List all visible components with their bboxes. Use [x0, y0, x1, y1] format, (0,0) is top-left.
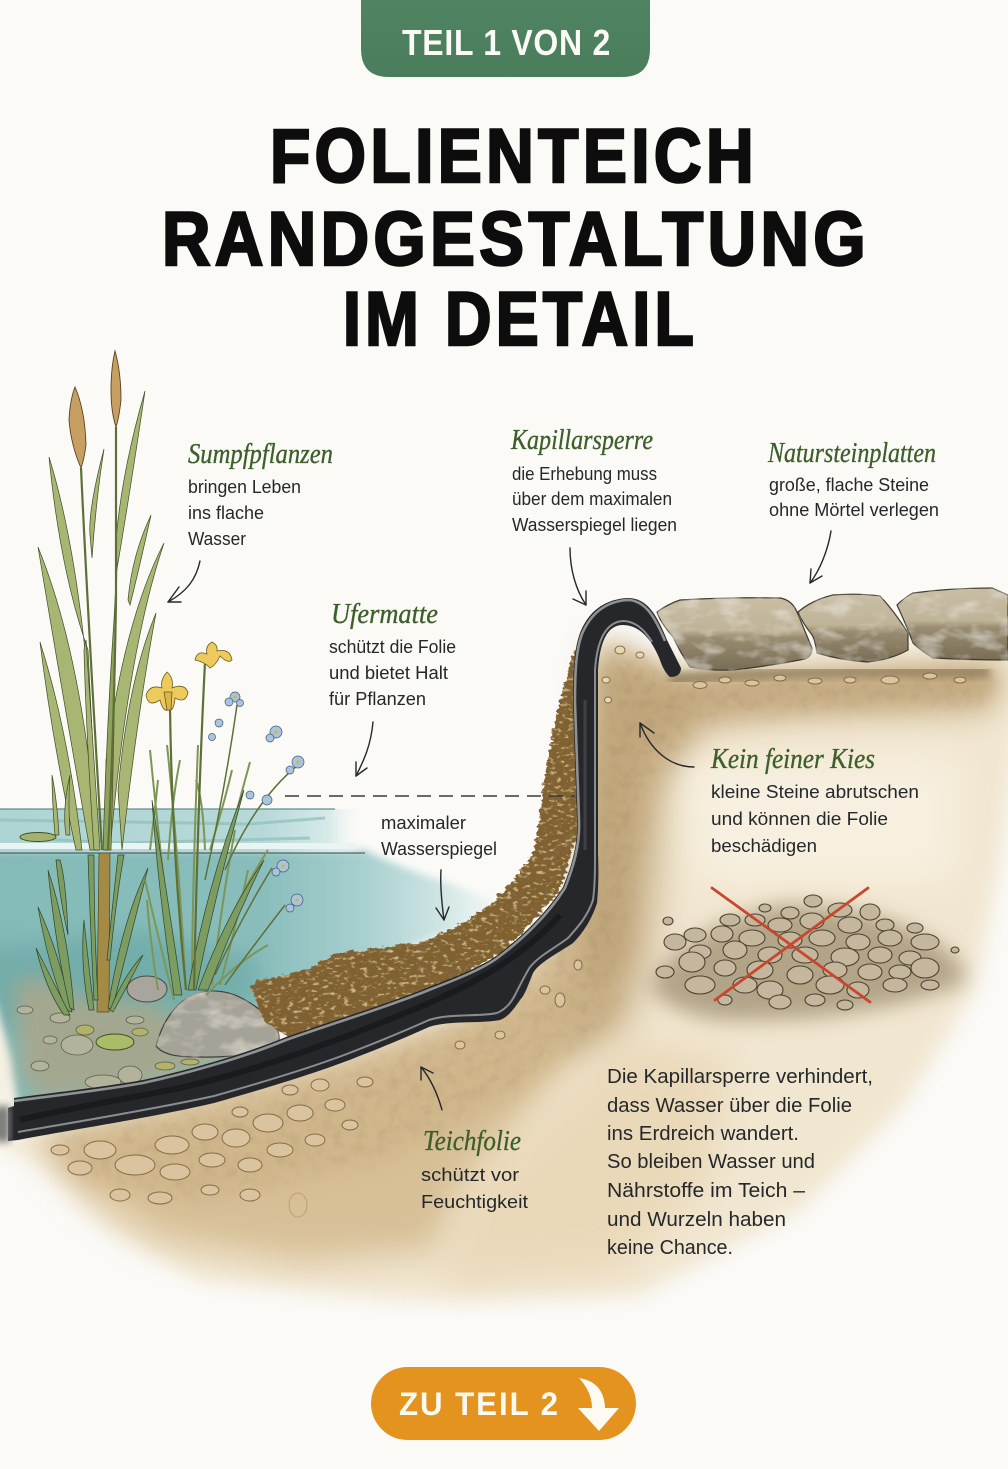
iris and grasses: [145, 642, 298, 1000]
coconut fibre mat: [250, 622, 590, 1040]
label: Kapillarsperre: Kapillarsperre: [510, 424, 653, 456]
arrow: to marsh plants: [168, 561, 200, 602]
label: Sumpfpflanzen: [188, 438, 333, 549]
explanation paragraph: und Wurzeln haben: [607, 1209, 786, 1231]
explanation paragraph: Nährstoffe im Teich –: [607, 1180, 806, 1202]
pebbles under the liner: [51, 646, 644, 1217]
gravel band under stones: [670, 671, 990, 688]
max water level dashed line: [285, 795, 575, 797]
forget-me-not flowers: [208, 692, 304, 912]
label: Ufermatte: Ufermatte: [331, 598, 438, 630]
title: FOLIENTEICH: [270, 114, 758, 199]
reed: underwater part: [36, 853, 148, 1015]
label: Teichfolie: schützt vor: [421, 1165, 519, 1185]
label: Kein feiner Kies: und können die Folie: [711, 809, 888, 829]
button: to part 2: [371, 1367, 636, 1440]
reed: above water part: [38, 351, 164, 850]
label: Sumpfpflanzen: bringen Leben: [188, 477, 301, 497]
label: Sumpfpflanzen: Sumpfpflanzen: [188, 438, 333, 470]
label: Natursteinplatten: [767, 437, 939, 520]
top badge: part 1 of 2: TEIL 1 VON 2: [402, 22, 611, 63]
soil cross-section: [0, 560, 1008, 1320]
top badge: part 1 of 2: [361, 0, 650, 77]
label: Teichfolie: [421, 1125, 528, 1212]
water: [0, 809, 505, 1110]
label: Teichfolie: Feuchtigkeit: [421, 1192, 528, 1212]
label: Ufermatte: und bietet Halt: [329, 663, 448, 683]
arrow: to water level: [436, 870, 449, 920]
label: maximaler Wasserspiegel: maximaler: [381, 813, 466, 833]
label: Ufermatte: schützt die Folie: [329, 637, 456, 657]
title: RANDGESTALTUNG: [162, 197, 870, 282]
lake bed with pebbles: [0, 978, 290, 1120]
label: maximaler Wasserspiegel: [381, 813, 497, 859]
arrow: to liner: [421, 1067, 442, 1110]
lily pads: [20, 832, 134, 1050]
natural stone slabs: [657, 588, 1008, 670]
label: Kapillarsperre: [510, 424, 677, 535]
rock at water edge: [127, 976, 279, 1057]
icon: curved down arrow: [578, 1378, 619, 1431]
label: Sumpfpflanzen: Wasser: [188, 529, 246, 549]
button: to part 2: ZU TEIL 2: [399, 1386, 560, 1422]
label: Kapillarsperre: Wasserspiegel liegen: [512, 515, 677, 535]
title: IM DETAIL: [343, 277, 698, 362]
label: Kein feiner Kies: [710, 743, 919, 856]
pond liner: [0, 598, 681, 1142]
explanation paragraph: keine Chance.: [607, 1237, 733, 1259]
label: Natursteinplatten: große, flache Steine: [769, 475, 929, 495]
red cross over gravel: [712, 888, 870, 1002]
label: Ufermatte: [329, 598, 456, 709]
arrow: to mat: [356, 722, 373, 776]
label: Ufermatte: für Pflanzen: [329, 689, 426, 709]
label: Kapillarsperre: die Erhebung muss: [512, 464, 657, 484]
label: Teichfolie: Teichfolie: [423, 1125, 521, 1157]
label: maximaler Wasserspiegel: Wasserspiegel: [381, 839, 497, 859]
explanation paragraph: So bleiben Wasser und: [607, 1151, 815, 1173]
label: Kein feiner Kies: Kein feiner Kies: [710, 743, 875, 775]
label: Natursteinplatten: Natursteinplatten: [767, 437, 936, 469]
explanation paragraph: [607, 1066, 873, 1259]
arrow: to stone slabs: [810, 531, 831, 583]
arrow: to soil beside liner: [640, 723, 694, 767]
arrow: to capillary barrier: [570, 548, 586, 605]
explanation paragraph: dass Wasser über die Folie: [607, 1095, 852, 1117]
label: Kein feiner Kies: kleine Steine abrutschen: [711, 782, 919, 802]
label: Kapillarsperre: über dem maximalen: [512, 489, 672, 509]
title: [162, 114, 870, 362]
explanation paragraph: Die Kapillarsperre verhindert,: [607, 1066, 873, 1088]
label: Sumpfpflanzen: ins flache: [188, 503, 264, 523]
rejected fine gravel pile: [650, 895, 964, 1021]
label: Natursteinplatten: ohne Mörtel verlegen: [769, 500, 939, 520]
explanation paragraph: ins Erdreich wandert.: [607, 1123, 799, 1145]
label: Kein feiner Kies: beschädigen: [711, 836, 817, 856]
marsh plants: [36, 351, 304, 1015]
